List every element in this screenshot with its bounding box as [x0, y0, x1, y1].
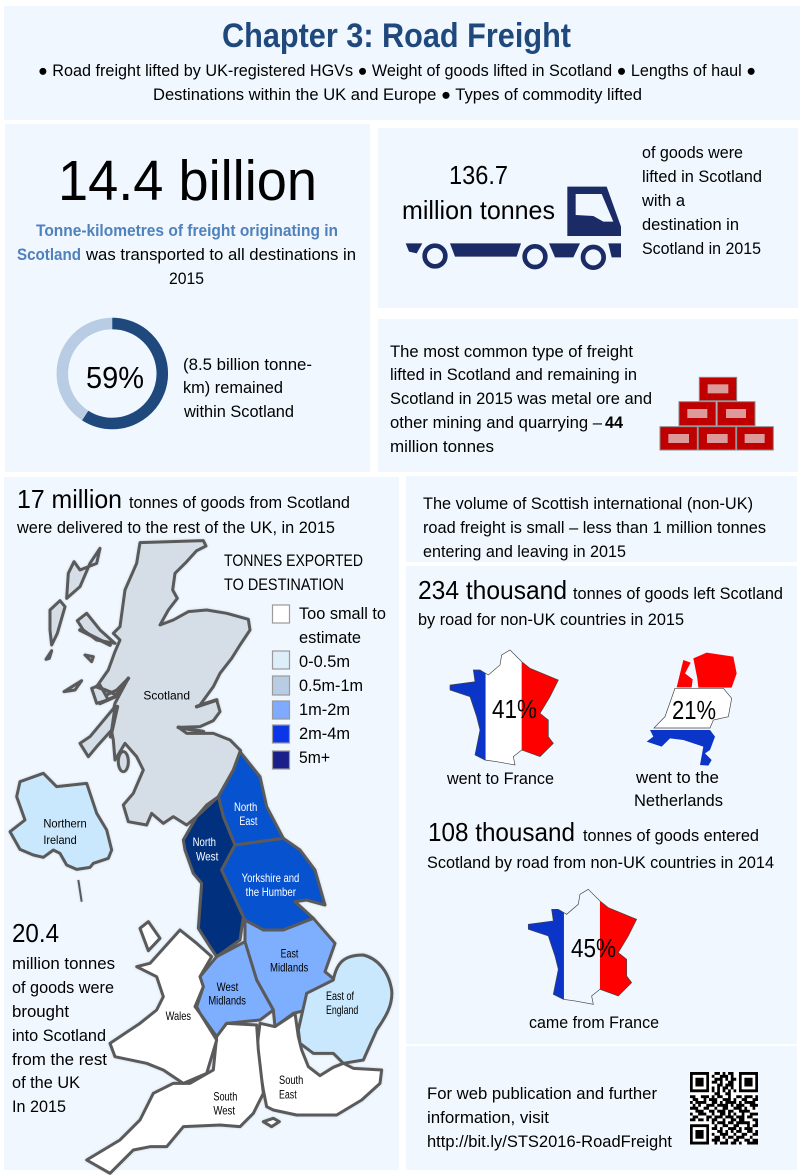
web link text	[427, 1085, 672, 1151]
caption: went to the Netherlands: Netherlands	[634, 792, 723, 810]
legend: TO DESTINATION	[224, 576, 344, 594]
region labels	[43, 689, 358, 1117]
title: Chapter 3: Road Freight	[222, 17, 571, 55]
icon: France flag map 45%	[528, 888, 637, 1005]
description	[641, 144, 762, 258]
description	[17, 222, 356, 288]
region labels: East	[281, 947, 299, 960]
heading: 17 million: 17 million	[17, 484, 122, 514]
description: The volume of Scottish international (non-UK)	[423, 495, 753, 513]
panel: UK map	[4, 477, 399, 1173]
donut caption	[183, 356, 312, 421]
heading: 17 million: tonnes of goods from Scotland	[129, 494, 350, 512]
subtitle topics	[38, 62, 756, 104]
region: South West	[87, 1023, 263, 1173]
heading: 17 million: were delivered to the rest of the UK, in 2015	[16, 519, 335, 537]
description: entering and leaving in 2015	[423, 543, 626, 561]
statistic	[402, 160, 555, 225]
map of the UK regions	[10, 541, 392, 1173]
icon: Netherlands flag map 21%: 21%	[672, 695, 716, 725]
callout: 20.4 million tonnes: million tonnes	[12, 955, 115, 973]
sea lochs of western Scotland	[80, 630, 217, 737]
description: lifted in Scotland and remaining in	[390, 366, 637, 384]
region labels: East	[239, 815, 258, 828]
callout: 20.4 million tonnes: of the UK	[12, 1074, 80, 1092]
legend: 0.5m-1m	[299, 677, 363, 695]
region labels: West	[196, 851, 219, 864]
icon: Netherlands flag map 21%	[647, 653, 737, 766]
region labels: North	[234, 801, 257, 814]
heading: 234 thousand	[418, 575, 783, 629]
icon: France flag map 41%: 41%	[492, 694, 537, 724]
heading: 234 thousand: by road for non-UK countries in 2015	[418, 611, 684, 629]
region: Anglesey	[140, 922, 160, 951]
region labels: South	[279, 1074, 303, 1087]
panel: 136.7 million tonnes	[378, 128, 798, 308]
heading: 234 thousand: 234 thousand	[418, 575, 567, 605]
donut chart: 59%	[62, 324, 162, 424]
description: Tonne-kilometres of freight originating in	[36, 222, 338, 240]
legend	[224, 552, 386, 769]
region: Wales	[110, 930, 217, 1083]
description: other mining and quarrying –	[390, 414, 603, 432]
callout: 20.4 million tonnes	[12, 918, 115, 1116]
callout: 20.4 million tonnes: of goods were	[12, 979, 114, 997]
panel: 14.4 billion tonne-kilometres	[5, 124, 370, 472]
statistic: million tonnes	[402, 195, 555, 225]
caption: went to the Netherlands	[634, 769, 723, 810]
region labels: Northern	[43, 818, 87, 831]
description: 2015	[169, 270, 204, 288]
region: West Midlands	[197, 942, 273, 1037]
icon: France flag map 45%: 45%	[571, 933, 616, 963]
region labels: Midlands	[208, 994, 246, 1007]
legend: estimate	[299, 629, 361, 647]
callout: 20.4 million tonnes: from the rest	[12, 1051, 107, 1069]
web link text: For web publication and further	[427, 1085, 658, 1103]
callout: 20.4 million tonnes: In 2015	[12, 1098, 66, 1116]
description: was transported to all destinations in	[85, 246, 356, 264]
icon: truck	[406, 187, 621, 268]
legend: 5m+	[299, 749, 330, 767]
panel: international volume	[406, 476, 797, 562]
panel: most common freight	[378, 319, 798, 472]
region: North East	[218, 752, 283, 845]
description: The most common type of freight	[390, 343, 633, 361]
legend: 1m-2m	[299, 701, 350, 719]
region: Northern Ireland	[10, 773, 112, 869]
region labels: South	[213, 1091, 237, 1104]
caption: came from France: came from France	[529, 1014, 659, 1032]
donut caption: km) remained	[183, 379, 283, 397]
region labels: Scotland	[143, 689, 190, 702]
region: Scotland	[46, 541, 250, 825]
icon: France flag map 41%	[450, 650, 559, 766]
description: destination in	[642, 216, 739, 234]
region labels: Wales	[166, 1010, 191, 1023]
callout: 20.4 million tonnes: brought	[12, 1003, 69, 1021]
heading: 17 million	[16, 484, 350, 537]
description	[390, 343, 652, 456]
region labels: East	[279, 1088, 297, 1101]
region: North West	[183, 797, 243, 957]
panel: header	[4, 6, 800, 120]
region labels: West	[213, 1104, 236, 1117]
description: of goods were	[642, 144, 743, 162]
donut caption: within Scotland	[183, 403, 294, 421]
legend: 2m-4m	[299, 725, 350, 743]
web link text: http://bit.ly/STS2016-RoadFreight	[427, 1133, 672, 1151]
icon: stacked bricks	[660, 377, 773, 450]
region: East of England	[298, 955, 392, 1063]
region labels: Yorkshire and	[242, 872, 299, 885]
region labels: Ireland	[43, 834, 77, 847]
callout: 20.4 million tonnes: 20.4	[12, 918, 59, 948]
description: with a	[641, 192, 686, 210]
heading: 234 thousand: tonnes of goods left Scotland	[573, 585, 783, 603]
subtitle topics: Destinations within the UK and Europe ● Types of commodity lifted	[153, 86, 642, 104]
panel: further information	[406, 1046, 797, 1170]
region labels: Midlands	[270, 962, 308, 975]
donut chart: 59%: 59%	[86, 360, 144, 395]
description: Scotland in 2015	[642, 240, 761, 258]
legend: TONNES EXPORTED	[224, 552, 363, 570]
caption: went to France: went to France	[446, 770, 554, 788]
description: Scotland	[17, 246, 81, 264]
heading: 108 thousand: Scotland by road from non-UK countries in 2014	[427, 854, 774, 872]
region: Isle of Wight	[263, 1118, 279, 1127]
donut caption: (8.5 billion tonne-	[183, 356, 312, 374]
description: million tonnes	[390, 438, 494, 456]
icon: QR code	[690, 1072, 758, 1144]
callout: 20.4 million tonnes: into Scotland	[12, 1027, 106, 1045]
region labels: England	[326, 1004, 358, 1017]
description: road freight is small – less than 1 million tonnes	[423, 519, 766, 537]
subtitle topics: ● Road freight lifted by UK-registered HGVs ● Weight of goods lifted in Scotland ● Lengths of haul ●	[38, 62, 756, 80]
heading: 108 thousand: 108 thousand	[428, 817, 575, 847]
description: Scotland in 2015 was metal ore and	[390, 390, 652, 408]
legend: 0-0.5m	[299, 653, 350, 671]
region: South East	[257, 1013, 382, 1115]
statistic: 136.7	[449, 160, 508, 190]
description: 44	[605, 414, 624, 432]
headline number: 14.4 billion	[58, 149, 317, 213]
region: East Midlands	[245, 918, 335, 1027]
web link text: information, visit	[427, 1109, 549, 1127]
heading: 108 thousand: tonnes of goods entered	[583, 827, 759, 845]
region labels: the Humber	[246, 886, 296, 899]
region: Yorkshire and the Humber	[222, 838, 325, 930]
caption: went to the Netherlands: went to the	[635, 769, 719, 787]
panel: international destinations and origins	[406, 566, 797, 1044]
region labels: West	[217, 981, 239, 994]
region labels: North	[193, 836, 216, 849]
description	[423, 495, 766, 561]
description: lifted in Scotland	[642, 168, 762, 186]
region labels: East of	[326, 990, 355, 1003]
legend: Too small to	[299, 605, 386, 623]
heading: 108 thousand	[427, 817, 774, 872]
